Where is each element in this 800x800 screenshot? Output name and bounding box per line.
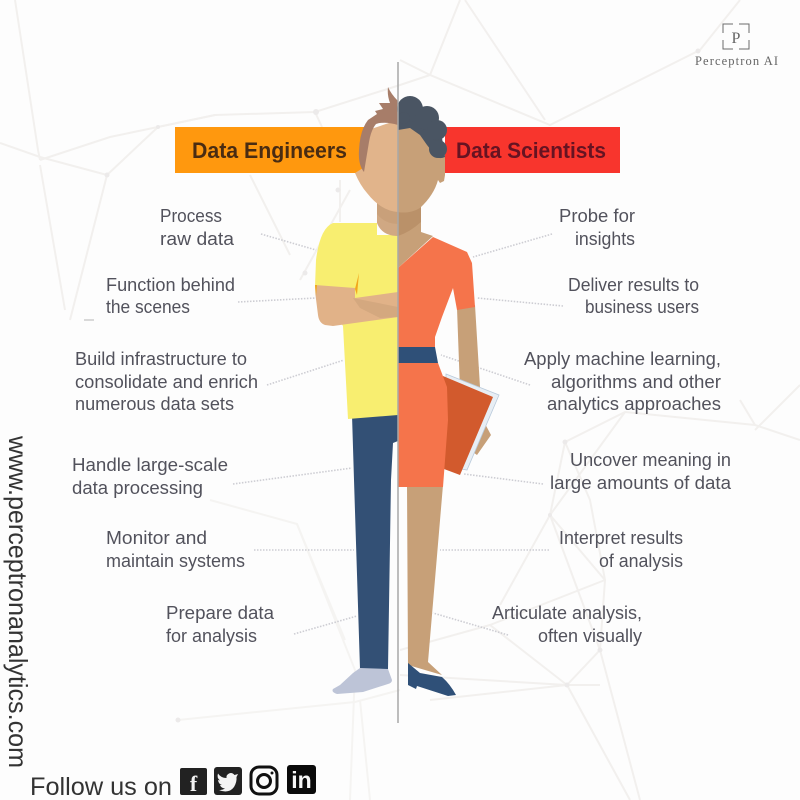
text: Process raw data xyxy=(160,206,235,249)
engineer hair xyxy=(359,87,398,172)
text: Probe for insights: insights xyxy=(575,229,635,249)
logo: Perceptron AI xyxy=(695,24,778,68)
text: Probe for insights xyxy=(559,206,635,249)
icon: facebook: f xyxy=(190,771,198,796)
engineer neck xyxy=(377,200,398,236)
logo: Perceptron AI: Perceptron AI xyxy=(695,54,778,68)
heading: Data Engineers: Data Engineers xyxy=(192,138,347,163)
text: Build infrastructure: consolidate and enrich xyxy=(75,372,258,392)
text: Handle large-scale data processing xyxy=(72,455,228,498)
text: Build infrastructure xyxy=(75,349,258,414)
text: Deliver results to business users xyxy=(568,275,699,317)
text: Deliver results to business users: business users xyxy=(585,297,699,317)
text: Process raw data: Process xyxy=(160,206,222,226)
text: Prepare data for analysis xyxy=(166,603,275,646)
heading: Data Scientists xyxy=(445,127,620,173)
belt xyxy=(398,347,438,363)
text: Function behind the scenes: Function behind xyxy=(106,275,235,295)
logo: Perceptron AI: P xyxy=(732,30,741,47)
text: Apply machine learning: Apply machine learning, xyxy=(524,349,721,369)
text: Uncover meaning xyxy=(550,450,732,493)
text: Articulate analysis, often visually: Articulate analysis, xyxy=(492,603,642,623)
scientist dress xyxy=(398,237,475,487)
engineer shoe xyxy=(332,668,392,694)
text: Process raw data: raw data xyxy=(160,229,235,249)
text: Prepare data for analysis: for analysis xyxy=(166,626,257,646)
scientist arm and hand xyxy=(457,305,491,455)
engineer shirt xyxy=(315,223,398,419)
text: Articulate analysis, often visually xyxy=(492,603,642,646)
text: Interpret results of analysis xyxy=(559,528,683,571)
text: Build infrastructure: Build infrastructure to xyxy=(75,349,247,369)
figure: half engineer half scientist xyxy=(315,87,499,696)
text: Handle large-scale data processing: data processing xyxy=(72,478,203,498)
text: Probe for insights: Probe for xyxy=(559,206,635,226)
dotted leader lines xyxy=(233,234,563,635)
scientist shoe xyxy=(408,663,456,696)
icon: facebook xyxy=(180,768,207,796)
text: Monitor and maintain systems: Monitor and xyxy=(106,528,207,548)
icon: linkedin: in xyxy=(291,767,312,793)
icon: instagram xyxy=(251,767,277,794)
text: Prepare data for analysis: Prepare data xyxy=(166,603,275,623)
engineer trousers xyxy=(352,414,398,669)
scientist leg xyxy=(407,485,443,675)
center divider line xyxy=(397,62,399,723)
text: Monitor and maintain systems: maintain systems xyxy=(106,551,245,571)
engineer arm xyxy=(315,285,398,326)
icon: linkedin xyxy=(287,765,316,794)
text: Build infrastructure: numerous data sets xyxy=(75,394,234,414)
text: Apply machine learning: analytics approaches xyxy=(547,394,721,414)
engineer face xyxy=(355,120,398,212)
website vertical text: www.perceptronanalytics.com xyxy=(3,435,33,768)
text: Function behind the scenes xyxy=(106,275,235,317)
scientist hair xyxy=(397,96,447,158)
text: Apply machine learning xyxy=(524,349,721,414)
text: Monitor and maintain systems xyxy=(106,528,245,571)
heading: Data Engineers xyxy=(175,127,367,173)
text: Uncover meaning: Uncover meaning in xyxy=(570,450,731,470)
text: Handle large-scale data processing: Handle large-scale xyxy=(72,455,228,475)
heading: Data Scientists: Data Scientists xyxy=(456,138,606,163)
text: Interpret results of analysis: Interpret results xyxy=(559,528,683,548)
text: Function behind the scenes: the scenes xyxy=(106,297,190,317)
icon: twitter xyxy=(214,767,242,795)
text: Articulate analysis, often visually: often visually xyxy=(538,626,642,646)
text: Interpret results of analysis: of analysis xyxy=(599,551,683,571)
scientist face xyxy=(398,118,445,212)
scientist neck and chest xyxy=(398,200,433,268)
text: Deliver results to business users: Deliver results to xyxy=(568,275,699,295)
folder xyxy=(443,374,499,475)
text: Apply machine learning: algorithms and other xyxy=(551,372,721,392)
text: Uncover meaning: large amounts of data xyxy=(550,473,732,493)
